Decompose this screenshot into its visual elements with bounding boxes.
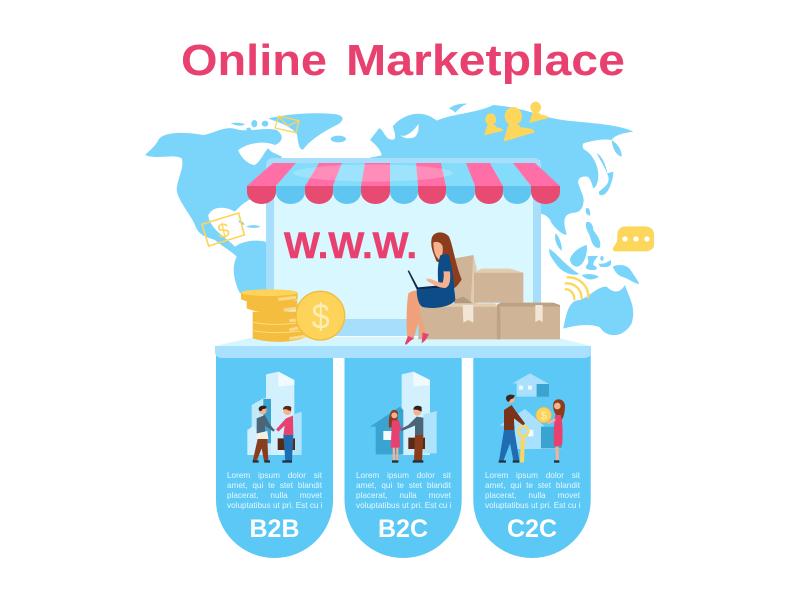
panel: c2c background (473, 352, 591, 558)
label: b2c: B2C (378, 515, 428, 543)
icon: speech bubble (613, 226, 654, 251)
panel: b2b (227, 372, 323, 543)
text: c2c body: Lorem ipsum dolor sit (485, 471, 580, 480)
icon: banknote: $ (216, 219, 232, 244)
text: c2c body: placerat, nulla movet (485, 491, 580, 500)
shelf (215, 337, 591, 358)
text: c2c body: voluptatibus ut pri. Est cu i. (485, 501, 581, 510)
illustration: c2c couple and key (499, 373, 565, 463)
title: Marketplace (346, 36, 625, 85)
text: b2c body: amet, qui te stet blandit (356, 481, 451, 490)
panel: b2c background (344, 352, 462, 558)
boxes (418, 255, 560, 339)
text: b2b body (227, 471, 323, 513)
panel: c2c (485, 373, 581, 543)
icon: people (484, 102, 549, 142)
text: b2c body: placerat, nulla movet (356, 491, 451, 500)
coin stack: $ (312, 298, 330, 337)
panel: b2c (356, 372, 452, 543)
text: b2c body: voluptatibus ut pri. Est cu i. (356, 501, 452, 510)
text: b2b body: amet, qui te stet blandit (227, 481, 322, 490)
title: Online (181, 36, 327, 85)
text: b2b body: Lorem ipsum dolor sit (227, 471, 322, 480)
world map (145, 104, 639, 335)
text: b2b body: placerat, nulla movet (227, 491, 322, 500)
panel: b2b background (216, 352, 333, 558)
illustration: c2c couple and key: $ (541, 410, 548, 422)
text: c2c body: amet, qui te stet blandit (485, 481, 580, 490)
laptop (266, 158, 541, 336)
woman with laptop (405, 232, 462, 345)
text: c2c body (485, 471, 581, 513)
www text: W.W.W. (284, 225, 417, 266)
text: b2b body: voluptatibus ut pri. Est cu i. (227, 501, 323, 510)
illustration: b2c handshake (370, 372, 437, 463)
illustration: b2b handshake (247, 372, 302, 463)
label: b2b: B2B (249, 515, 300, 543)
text: b2c body: Lorem ipsum dolor sit (356, 471, 451, 480)
label: c2c: C2C (507, 515, 557, 543)
awning (247, 163, 560, 204)
coin stack (241, 289, 345, 342)
icon: wifi signal (566, 277, 588, 299)
map: eurasia and oceania (370, 104, 639, 335)
map: americas and greenland (145, 113, 346, 293)
icon: envelope (275, 116, 299, 133)
text: b2c body (356, 471, 452, 513)
icon: banknote (202, 213, 244, 246)
